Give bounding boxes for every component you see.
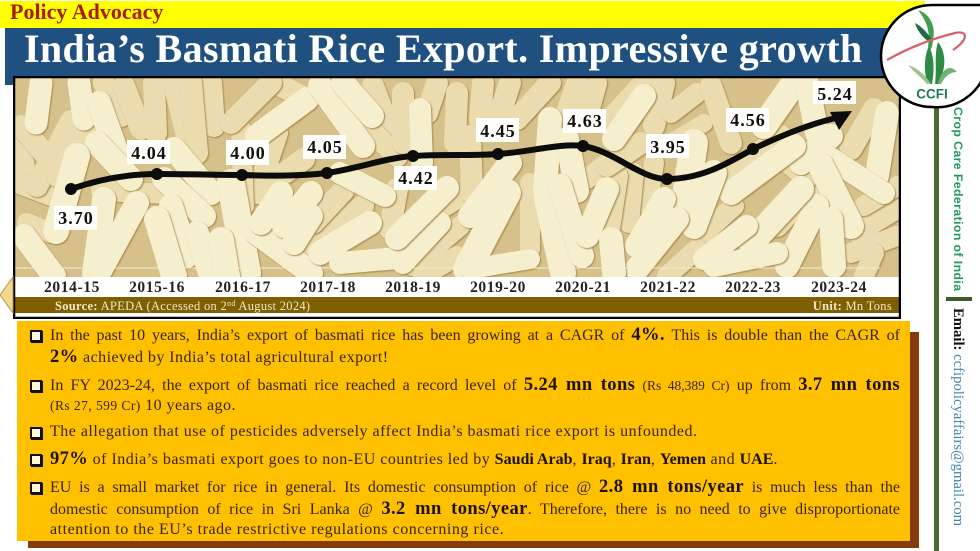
- source strip: Source: APEDA (Accessed on 2: [55, 299, 227, 313]
- data labels: [54, 81, 856, 230]
- data labels: 4.42: [398, 168, 434, 188]
- year axis labels: 2015-16: [129, 279, 185, 296]
- source strip: [15, 297, 899, 313]
- vertical text: organisation name: Crop Care Federation of India: [951, 107, 965, 291]
- data labels: 4.45: [480, 121, 516, 141]
- title: India’s Basmati Rice Export. Impressive growth: [24, 26, 863, 71]
- year axis labels: 2023-24: [811, 279, 867, 296]
- sidebar rule: [934, 100, 939, 551]
- logo: CCFI: [880, 4, 980, 108]
- bullet point 1: In the past 10 years, India’s export of basmati rice has been growing at a CAGR of 4%. This is double than the CAGR of: [50, 325, 900, 345]
- bullet point 2: (Rs 27, 599 Cr) 10 years ago.: [50, 397, 236, 414]
- year axis labels: 2017-18: [300, 279, 356, 296]
- key points panel: [17, 321, 910, 541]
- data labels: 3.95: [650, 137, 686, 157]
- year axis labels: 2020-21: [555, 279, 611, 296]
- data labels: 4.56: [730, 110, 766, 130]
- data labels: 5.24: [817, 84, 853, 104]
- year axis labels: 2014-15: [44, 279, 100, 296]
- bullet point 1: 2% achieved by India’s total agricultural export!: [50, 347, 388, 367]
- data line with arrow: [65, 111, 852, 195]
- source strip: August 2024): [236, 299, 310, 313]
- bullet point 3: The allegation that use of pesticides adversely affect India’s basmati rice export is unfounded.: [50, 423, 697, 440]
- short divider: [946, 297, 972, 301]
- rice photo: [15, 78, 899, 277]
- year axis labels: 2019-20: [470, 279, 526, 296]
- data labels: 4.04: [131, 143, 167, 163]
- year axis labels: 2021-22: [640, 279, 696, 296]
- title band: [5, 28, 890, 85]
- chart panel: [13, 76, 901, 319]
- year axis labels: 2018-19: [385, 279, 441, 296]
- year axis labels: 2016-17: [215, 279, 271, 296]
- bullet point 2: In FY 2023-24, the export of basmati rice reached a record level of 5.24 mn tons (Rs 48,389 Cr) up from 3.7 mn tons: [50, 375, 900, 395]
- line chart over rice photo: [13, 76, 901, 319]
- bullet point 5: attention to the EU’s trade restrictive regulations concerning rice.: [50, 521, 504, 538]
- data labels: 4.05: [307, 137, 343, 157]
- side tab arrow: [0, 276, 14, 314]
- vertical text: email: Email: ccfipolicyaffairs@gmail.com: [950, 308, 966, 526]
- source strip: nd: [227, 299, 236, 308]
- year axis labels: [44, 279, 867, 296]
- source strip: Unit: Mn Tons: [813, 299, 892, 313]
- panel shadow: [28, 332, 919, 548]
- bullet point 5: EU is a small market for rice in general. Its domestic consumption of rice @ 2.8 mn tons/year is much less than the: [50, 477, 900, 497]
- bullet point 5: domestic consumption of rice in Sri Lanka @ 3.2 mn tons/year. Therefore, there is no need to give disproportionate: [50, 499, 900, 519]
- header band: policy advocacy: [0, 1, 925, 28]
- bullet point 4: 97% of India’s basmati export goes to non-EU countries led by Saudi Arab, Iraq, Iran, Yemen and UAE.: [50, 449, 778, 469]
- year axis labels: 2022-23: [725, 279, 781, 296]
- data labels: 3.70: [58, 208, 94, 228]
- data labels: 4.63: [567, 111, 603, 131]
- logo: CCFI: CCFI: [916, 86, 948, 102]
- data labels: 4.00: [230, 143, 266, 163]
